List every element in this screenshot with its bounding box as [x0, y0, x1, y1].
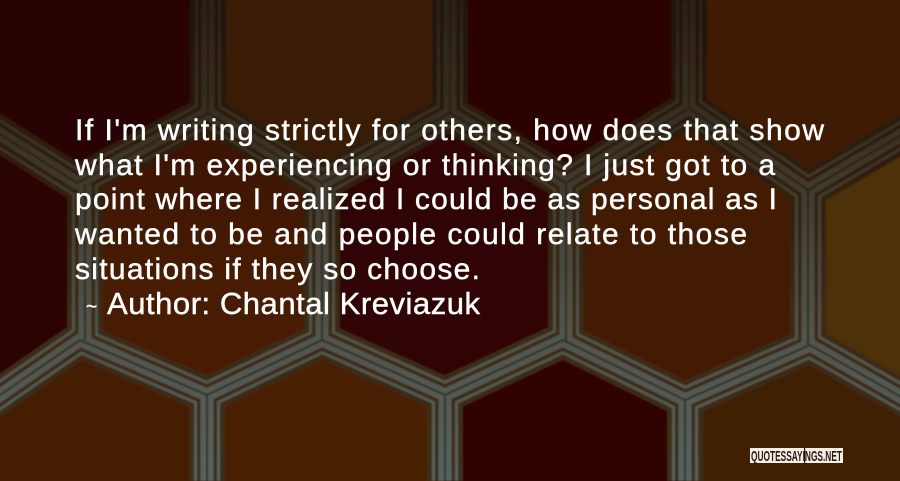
quote line 5: situations if they so choose. — [75, 253, 480, 286]
quote text — [74, 114, 824, 286]
quote line 3: point where I realized I could be as personal as I — [75, 183, 777, 216]
tilde mark: ~ — [86, 297, 97, 318]
author name: Author: Chantal Kreviazuk — [107, 286, 480, 321]
middle row cells — [0, 108, 900, 400]
quote line 4: wanted to be and people could relate to those — [74, 218, 747, 251]
bottom row cells — [0, 340, 900, 481]
author attribution — [86, 286, 480, 321]
watermark: quotessayings.net — [750, 448, 843, 465]
top row cells — [0, 0, 900, 190]
quote line 2: what I'm experiencing or thinking? I just got to a — [74, 149, 775, 182]
quote line 1: If I'm writing strictly for others, how does that show — [75, 114, 824, 147]
